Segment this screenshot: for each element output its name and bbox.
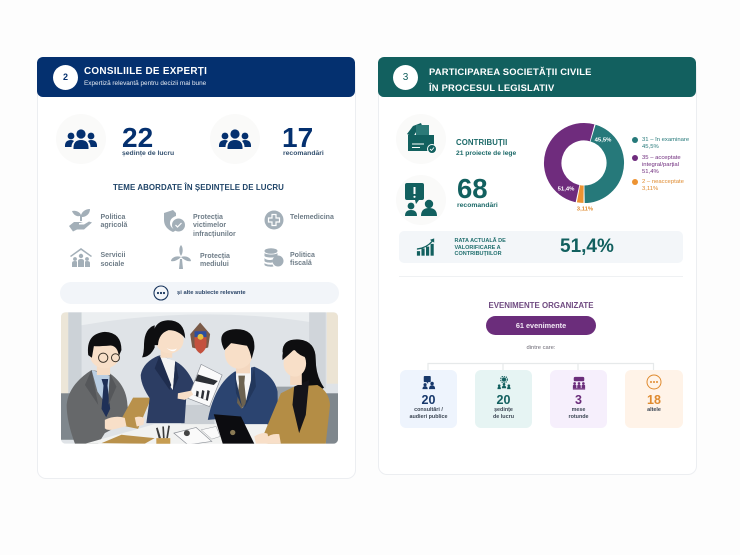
illustration: team meeting xyxy=(61,312,338,444)
label contributions: CONTRIBUȚII xyxy=(456,138,507,147)
legend text teal: 45,5% xyxy=(642,144,659,150)
heading: civil society participation: ÎN PROCESUL LEGISLATIV xyxy=(429,82,554,92)
legend: under examination xyxy=(632,137,689,150)
topic: social services xyxy=(100,252,125,268)
donut chart: 45,5% xyxy=(595,138,612,144)
label others: altele xyxy=(647,407,661,413)
topic: agricultural policy xyxy=(100,214,128,229)
icon: telemedicine xyxy=(264,210,284,230)
subheading: Expertiză relevantă pentru decizii mai bune xyxy=(84,80,206,86)
label round tables: mese xyxy=(572,407,585,413)
pill: 61 events: 61 evenimente xyxy=(516,321,566,330)
legend text purple: 35 – acceptate xyxy=(642,155,681,161)
legend: not accepted xyxy=(632,179,684,192)
legend text orange xyxy=(642,179,684,192)
chart sheet held by woman xyxy=(178,364,222,407)
label meetings: ședințe de lucru xyxy=(122,150,174,156)
legend text orange: 3,11% xyxy=(642,186,658,192)
legend text teal: 31 – în examinare xyxy=(642,137,689,143)
topic: social services: sociale xyxy=(100,261,124,268)
heading: organized events: EVENIMENTE ORGANIZATE xyxy=(488,301,594,310)
heading: civil society participation xyxy=(428,66,592,92)
callout label: CONTRIBUȚIILOR xyxy=(454,251,502,257)
panel: civil society participation xyxy=(378,60,697,475)
icon: agricultural policy xyxy=(69,209,92,232)
topic: agricultural policy: Politica xyxy=(100,214,125,220)
label sessions xyxy=(493,407,514,420)
callout: other relevant topics xyxy=(60,282,339,304)
topic: protection of crime victims xyxy=(193,214,236,238)
topic: fiscal policy: fiscală xyxy=(290,260,312,267)
person: woman in tan blazer xyxy=(264,339,330,444)
stat: 68 recommendations xyxy=(457,173,498,209)
label sessions: ședințe xyxy=(494,407,513,413)
label recommendations: recomandări xyxy=(283,150,324,156)
stat icon: recommendations xyxy=(210,114,260,164)
topic: protection of crime victims: victimelor xyxy=(193,222,226,229)
icon: contributions xyxy=(396,114,446,164)
topic: agricultural policy: agricolă xyxy=(100,222,127,229)
value 20 consultations: 20 xyxy=(422,393,435,407)
panel: expert councils xyxy=(37,60,356,479)
value 17: 17 xyxy=(282,122,313,153)
stat: 22 meetings xyxy=(122,122,174,156)
callout label xyxy=(454,237,506,257)
topic: protection of crime victims: infracțiunilor xyxy=(193,231,236,238)
coat of arms xyxy=(190,323,210,354)
label round tables: rotunde xyxy=(568,414,589,420)
event card: consultations xyxy=(400,370,457,428)
legend text purple: 51,4% xyxy=(642,169,659,175)
event card: round tables xyxy=(550,370,607,428)
callout label: VALORIFICARE A xyxy=(454,245,501,251)
icon: environmental protection xyxy=(171,245,191,269)
icon: others xyxy=(646,374,662,390)
section number 2: 2 xyxy=(63,72,68,82)
donut chart xyxy=(544,123,624,212)
donut chart: 51,4% xyxy=(558,186,575,192)
legend text teal xyxy=(642,137,689,150)
icon: working sessions xyxy=(497,376,511,390)
value 68: 68 xyxy=(457,173,488,204)
section number 3 xyxy=(393,65,418,90)
connector lines xyxy=(428,363,654,370)
icon: more dots xyxy=(153,286,169,300)
topic: environmental protection: mediului xyxy=(200,261,229,268)
value 22: 22 xyxy=(122,122,153,153)
icon: round tables xyxy=(572,376,586,390)
text: contributions xyxy=(456,138,516,156)
section number 3: 3 xyxy=(403,72,408,83)
topic: fiscal policy xyxy=(290,252,315,267)
pill: 61 events xyxy=(486,316,596,335)
icon: protection of crime victims xyxy=(164,210,185,232)
dot teal xyxy=(632,137,638,143)
icon: fiscal policy xyxy=(264,248,284,267)
legend: accepted xyxy=(632,155,681,175)
icon: recommendations feedback xyxy=(396,175,446,225)
legend text orange: 2 – neacceptate xyxy=(642,179,684,185)
topic: fiscal policy: Politica xyxy=(290,252,315,258)
header: expert councils xyxy=(37,57,355,97)
value 20 sessions: 20 xyxy=(497,393,510,407)
section number 2 xyxy=(53,65,78,90)
dot purple xyxy=(632,155,638,161)
label sessions: de lucru xyxy=(493,414,514,420)
header: civil society participation xyxy=(378,57,696,97)
value 18 others: 18 xyxy=(647,393,661,407)
callout text: și alte subiecte relevante xyxy=(177,290,246,296)
topic: environmental protection: Protecția xyxy=(200,252,230,260)
legend text purple: integral/parțial xyxy=(642,162,679,168)
callout: contribution rate xyxy=(399,231,683,263)
icon: consultations xyxy=(422,376,436,390)
value 3 round tables: 3 xyxy=(575,393,582,407)
label consultations xyxy=(409,407,448,420)
topic: environmental protection xyxy=(200,252,230,268)
callout value: 51,4% xyxy=(560,236,614,257)
person: man with glasses and tablet xyxy=(67,332,151,444)
label recommendations: recomandări xyxy=(457,202,498,209)
stat: 17 recommendations xyxy=(282,122,324,156)
topic: social services: Servicii xyxy=(100,252,125,259)
icon: social services xyxy=(70,248,92,267)
label consultations: consultări / xyxy=(414,407,443,413)
person: woman presenting chart xyxy=(141,320,195,423)
laptop xyxy=(214,414,269,444)
label consultations: audieri publice xyxy=(409,414,448,420)
divider xyxy=(399,276,683,277)
text: of which: dintre care: xyxy=(526,344,556,350)
topic: protection of crime victims: Protecția xyxy=(193,214,223,220)
dot orange xyxy=(632,179,638,185)
heading: expert councils: CONSILIILE DE EXPERȚI xyxy=(84,66,207,76)
icon: growth chart xyxy=(416,238,434,256)
topic: telemedicine: Telemedicina xyxy=(290,214,334,221)
donut chart: 3,11% xyxy=(577,206,594,212)
meeting table with items xyxy=(85,424,268,445)
event card: others xyxy=(625,370,683,428)
event card: working sessions xyxy=(475,370,532,428)
heading: topics: TEME ABORDATE ÎN ȘEDINȚELE DE LUCRU xyxy=(113,183,284,192)
stat icon: meetings xyxy=(56,114,106,164)
callout label: RATA ACTUALĂ DE xyxy=(454,238,506,244)
label round tables xyxy=(568,407,589,420)
person: man with tie xyxy=(208,329,278,431)
legend text purple xyxy=(642,155,681,175)
label draft laws: 21 proiecte de lege xyxy=(456,150,516,156)
heading: civil society participation: PARTICIPAREA SOCIETĂȚII CIVILE xyxy=(429,66,592,77)
